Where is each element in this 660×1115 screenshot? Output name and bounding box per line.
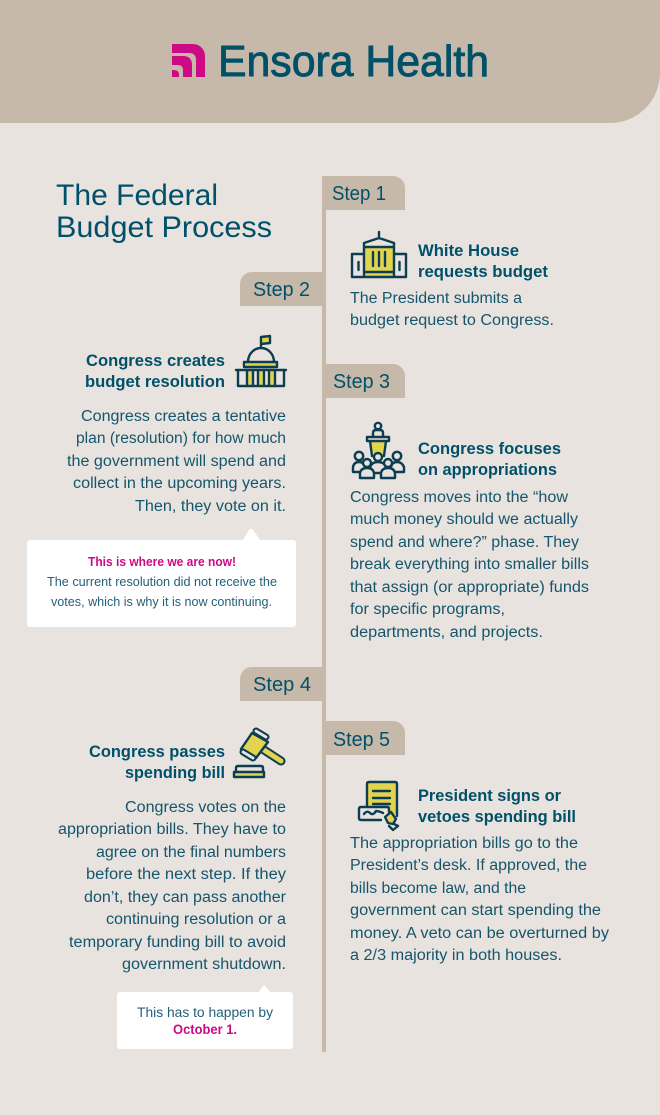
step 4 heading	[89, 743, 225, 782]
title: Budget Process	[56, 211, 272, 244]
callout: october 1 deadline: This has to happen by	[137, 1005, 273, 1020]
step 4	[58, 667, 322, 1049]
step 3 text	[350, 489, 589, 641]
callout: this is where we are now	[27, 529, 296, 627]
step 5 heading: vetoes spending bill	[418, 808, 576, 826]
callout: october 1 deadline	[117, 986, 293, 1049]
step 4 heading: spending bill	[125, 764, 225, 782]
step 5 text: money. A veto can be overturned by	[350, 925, 609, 942]
step 2 text: Then, they vote on it.	[135, 498, 286, 515]
icon: capitol	[236, 336, 286, 386]
step 2 heading	[85, 352, 225, 391]
step 3	[326, 364, 589, 641]
step 2 text: collect in the upcoming years.	[73, 475, 286, 492]
step 1 heading	[418, 242, 549, 281]
icon: gavel	[234, 731, 281, 777]
step 4 text: Congress votes on the	[125, 799, 286, 816]
icon: white house	[352, 232, 406, 277]
step 5 text: The appropriation bills go to the	[350, 835, 578, 852]
step 4 heading: Congress passes	[89, 743, 225, 761]
step 2 text	[67, 408, 286, 515]
step 3 heading	[418, 440, 561, 479]
step 2 text: Congress creates a tentative	[81, 408, 286, 425]
step 5 heading	[418, 787, 576, 826]
step 5 text: bills become law, and the	[350, 880, 526, 897]
step 4 text: temporary funding bill to avoid	[69, 934, 286, 951]
header band	[0, 0, 660, 123]
step 4 text: agree on the final numbers	[96, 844, 286, 861]
step 5 text: a 2/3 majority in both houses.	[350, 947, 562, 964]
step 1 text: The President submits a	[350, 290, 522, 307]
step 4 tab: Step 4	[253, 674, 311, 696]
title: The Federal	[56, 179, 218, 212]
step 2 heading: Congress creates	[86, 352, 225, 370]
step 5 text	[350, 835, 609, 964]
step 4 text: before the next step. If they	[86, 866, 286, 883]
step 1	[322, 176, 554, 329]
step 3 text: break everything into smaller bills	[350, 556, 589, 573]
step 5 tab	[326, 721, 405, 755]
step 5 heading: President signs or	[418, 787, 562, 805]
step 3 tab	[326, 364, 405, 398]
step 2 tab: Step 2	[253, 279, 310, 301]
logo: Ensora Health	[172, 37, 489, 86]
step 2 tab	[240, 272, 322, 306]
step 5 text: government can start spending the	[350, 902, 601, 919]
callout: this is where we are now: This is where we are now!	[88, 555, 236, 569]
icon: logo mark	[172, 44, 205, 77]
step 5	[326, 721, 609, 964]
step 3 heading: on appropriations	[418, 461, 557, 479]
step 3 text: that assign (or appropriate) funds	[350, 579, 589, 596]
step 3 heading: Congress focuses	[418, 440, 561, 458]
step 1 text	[350, 290, 554, 329]
step 3 text: spend and where?” phase. They	[350, 534, 579, 551]
step 1 heading: White House	[418, 242, 519, 260]
step 3 tab: Step 3	[333, 371, 390, 393]
timeline spine	[322, 176, 326, 1052]
title	[56, 179, 272, 244]
step 2 text: plan (resolution) for how much	[76, 430, 286, 447]
icon: signed document	[359, 782, 398, 830]
step 5 text: President’s desk. If approved, the	[350, 857, 587, 874]
step 4 text	[58, 799, 286, 973]
step 4 text: continuing resolution or a	[106, 911, 286, 928]
step 3 text: departments, and projects.	[350, 624, 543, 641]
step 1 text: budget request to Congress.	[350, 312, 554, 329]
step 1 heading: requests budget	[418, 263, 549, 281]
icon: congress podium and audience	[353, 423, 404, 478]
step 2 heading: budget resolution	[85, 373, 225, 391]
step 4 text: government shutdown.	[122, 956, 286, 973]
step 2 text: the government will spend and	[67, 453, 286, 470]
step 4 tab	[240, 667, 322, 701]
callout: this is where we are now: votes, which is why it is now continuing.	[51, 595, 272, 609]
step 3 text: for specific programs,	[350, 601, 505, 618]
step 1 tab: Step 1	[332, 183, 386, 205]
step 2	[27, 272, 322, 627]
logo wordmark: Ensora Health	[218, 37, 489, 86]
callout: this is where we are now: The current resolution did not receive the	[47, 575, 277, 589]
step 3 text: much money should we actually	[350, 511, 578, 528]
step 4 text: don’t, they can pass another	[84, 889, 286, 906]
step 4 text: appropriation bills. They have to	[58, 821, 286, 838]
callout: october 1 deadline: October 1.	[173, 1022, 237, 1037]
step 1 tab	[322, 176, 405, 210]
step 3 text: Congress moves into the “how	[350, 489, 569, 506]
step 5 tab: Step 5	[333, 729, 390, 751]
